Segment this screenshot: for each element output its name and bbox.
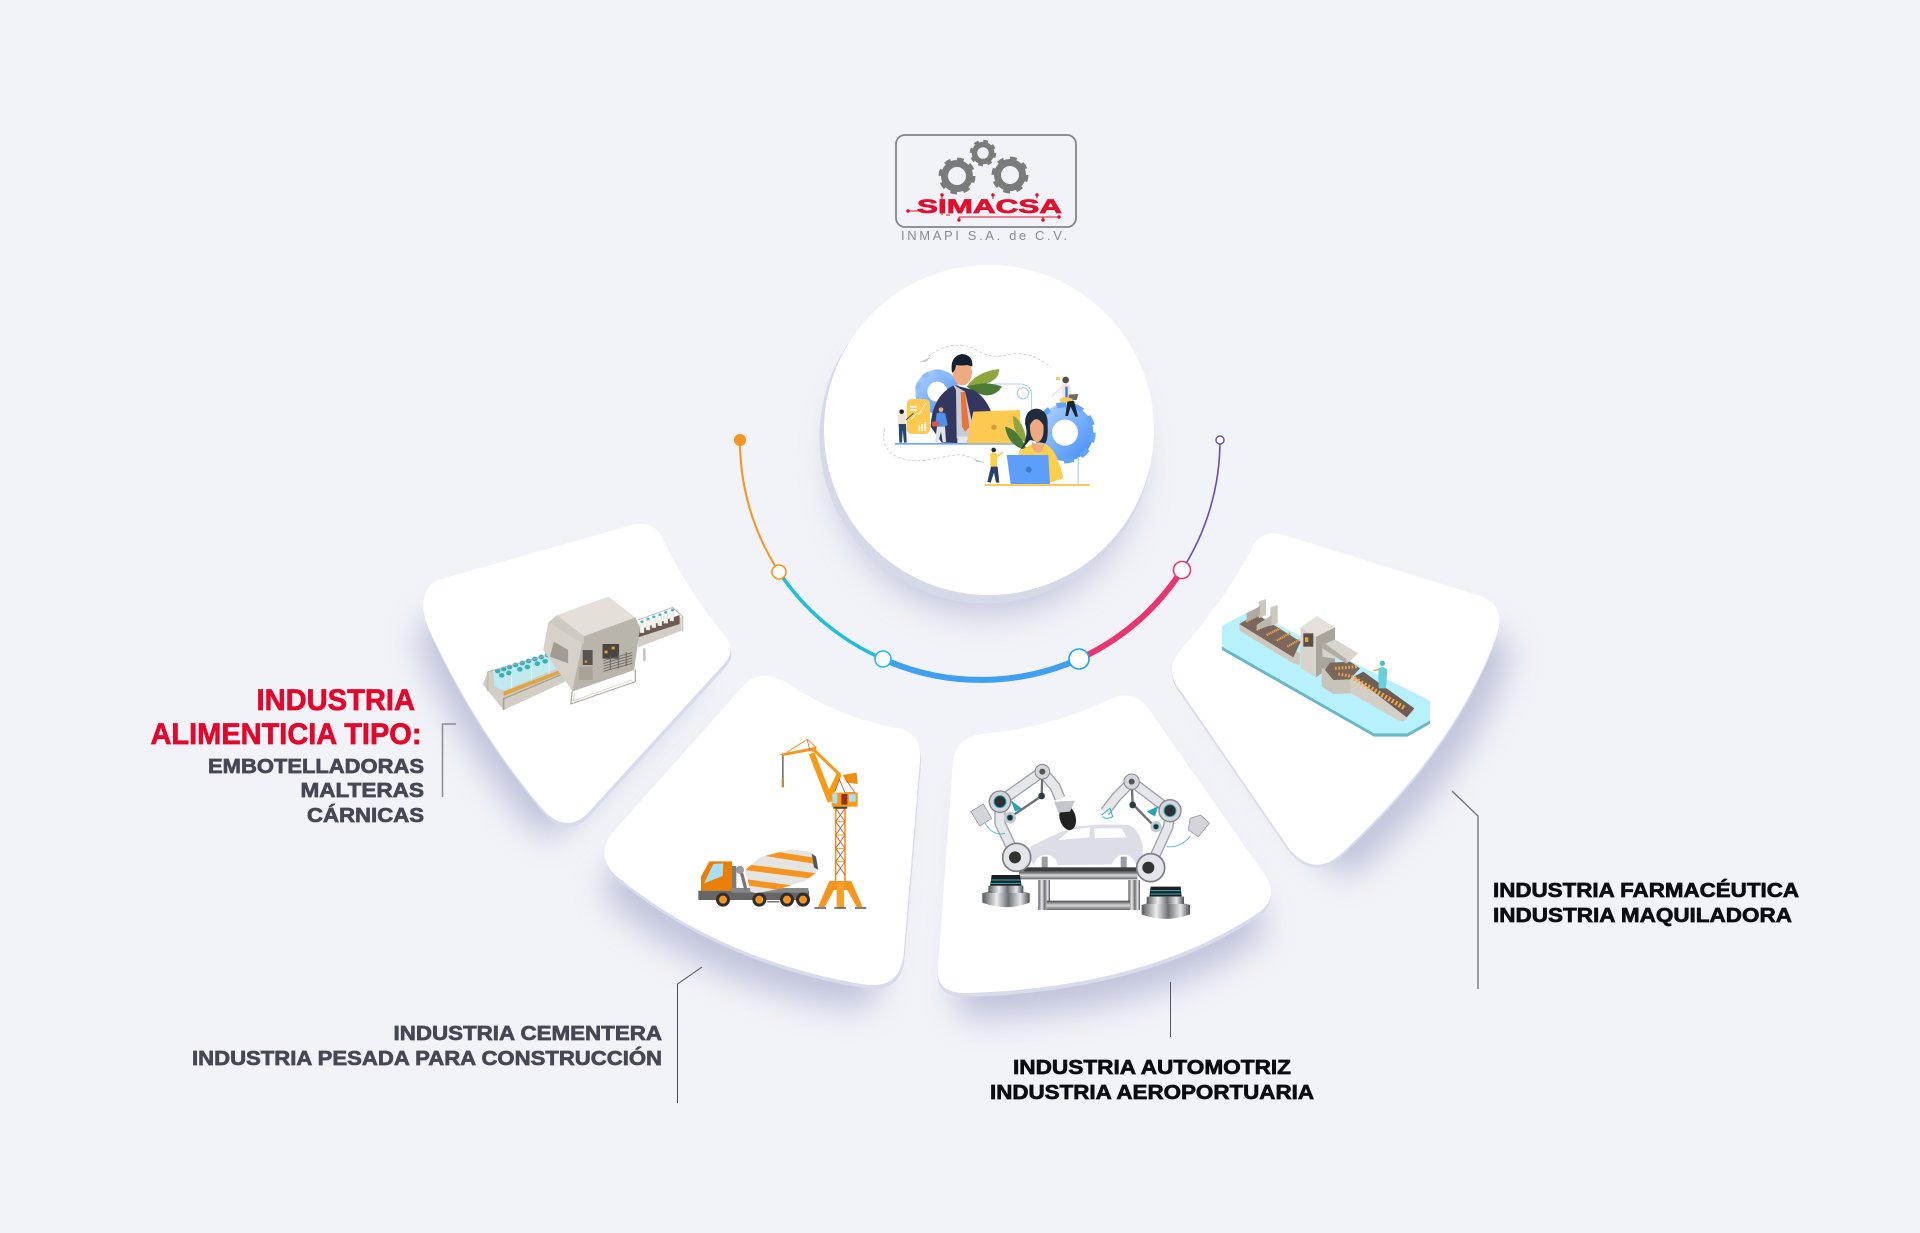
panel: pharmaceutical industry card — [1172, 533, 1510, 874]
text block: cement and heavy industry — [192, 1022, 662, 1070]
heading: food industry: ALIMENTICIA TIPO: — [150, 718, 422, 751]
node: pink-purple — [1174, 562, 1190, 578]
illustration: bottling machine — [483, 597, 683, 710]
text block: pharmaceutical and maquila industry — [1493, 879, 1799, 927]
illustration: robot arms and car — [971, 764, 1209, 919]
node: cyan-blue — [875, 651, 891, 667]
panel: food industry card — [419, 524, 732, 836]
progress arc with nodes — [734, 434, 1224, 680]
text block: food industry types: MALTERAS — [300, 779, 424, 802]
leader line: pharmaceutical industry — [1452, 791, 1478, 989]
text block: pharmaceutical and maquila industry: INDUSTRIA FARMACÉUTICA — [1493, 879, 1799, 902]
node: orange-cyan — [772, 565, 786, 579]
text block: automotive and airport industry: INDUSTRIA AUTOMOTRIZ — [1013, 1056, 1291, 1079]
icon: logo gears — [940, 142, 1026, 192]
text block: food industry types — [208, 755, 424, 827]
logo subtitle: INMAPI S.A. de C.V. — [901, 228, 1067, 243]
node: orange start — [734, 434, 746, 446]
panel: automotive industry card — [938, 696, 1271, 1019]
text block: automotive and airport industry: INDUSTRIA AEROPORTUARIA — [990, 1081, 1314, 1104]
text block: food industry types: EMBOTELLADORAS — [208, 755, 424, 778]
panel: cement industry card — [604, 676, 921, 1009]
text block: food industry types: CÁRNICAS — [307, 804, 424, 827]
illustration: business team with gears — [884, 345, 1093, 486]
text block: cement and heavy industry: INDUSTRIA PESADA PARA CONSTRUCCIÓN — [192, 1046, 662, 1070]
heading: food industry — [150, 684, 422, 751]
logo wordmark: SIMACSA — [917, 196, 1062, 218]
logo: SIMACSA — [896, 135, 1076, 243]
logo circuit lines — [907, 194, 1060, 221]
heading: food industry: INDUSTRIA — [256, 684, 415, 717]
leader line: automotive industry — [1170, 982, 1172, 1037]
infographic canvas — [150, 134, 1799, 1103]
text block: automotive and airport industry — [990, 1056, 1314, 1104]
node: blue-pink — [1069, 649, 1089, 669]
illustration: mixer truck and crane — [698, 739, 866, 908]
text block: cement and heavy industry: INDUSTRIA CEMENTERA — [394, 1022, 662, 1045]
node: purple end — [1216, 436, 1224, 444]
leader line: food industry — [442, 724, 456, 797]
central circle panel — [820, 265, 1154, 614]
text block: pharmaceutical and maquila industry: INDUSTRIA MAQUILADORA — [1493, 904, 1792, 927]
illustration: production line — [1222, 599, 1430, 737]
leader line: cement industry — [678, 967, 702, 1103]
